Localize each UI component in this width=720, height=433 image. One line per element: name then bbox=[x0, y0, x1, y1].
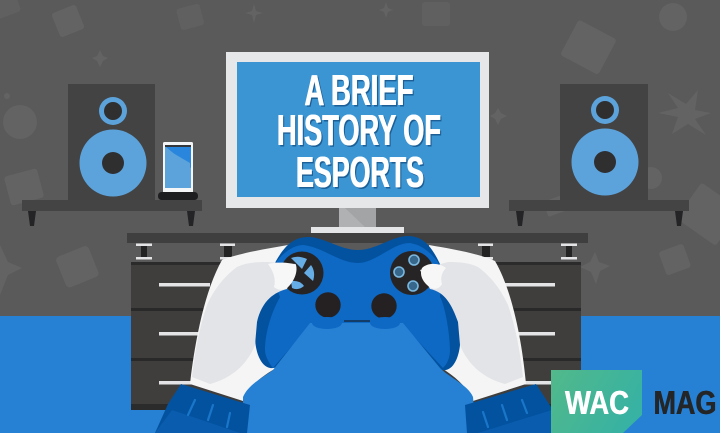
right speaker bbox=[560, 84, 648, 200]
desk bbox=[127, 233, 588, 410]
phone on dock bbox=[158, 142, 198, 200]
monitor bbox=[226, 52, 489, 208]
left thumbstick bbox=[315, 292, 341, 318]
title: HISTORY OF bbox=[278, 108, 442, 156]
left sleeve bbox=[155, 384, 250, 433]
monitor stand bbox=[311, 208, 404, 234]
title: ESPORTS bbox=[296, 148, 424, 197]
logo badge: WAC bbox=[565, 384, 629, 421]
left thumb bbox=[268, 263, 297, 290]
title: HISTORY OF bbox=[277, 106, 441, 155]
right sleeve bbox=[465, 384, 560, 433]
title bbox=[277, 66, 442, 198]
left d-pad bbox=[280, 252, 324, 294]
title: ESPORTS bbox=[296, 148, 424, 197]
left shelf bbox=[22, 200, 202, 226]
right shelf bbox=[509, 200, 689, 226]
right thumbstick bbox=[371, 293, 397, 319]
wall background bbox=[0, 0, 720, 316]
right buttons bbox=[390, 251, 434, 295]
controller lower bumps bbox=[310, 317, 404, 329]
left hand bbox=[190, 245, 290, 401]
game controller bbox=[255, 236, 460, 370]
left speaker bbox=[68, 84, 155, 200]
title: ESPORTS bbox=[298, 150, 426, 198]
title: A BRIEF bbox=[306, 68, 415, 116]
wall pattern bbox=[0, 0, 720, 295]
title: A BRIEF bbox=[305, 66, 414, 115]
title: A BRIEF bbox=[304, 66, 413, 115]
title: HISTORY OF bbox=[277, 106, 441, 155]
right palm bbox=[420, 262, 523, 384]
left palm bbox=[192, 262, 296, 384]
floor bbox=[0, 316, 720, 433]
right hand bbox=[428, 245, 526, 401]
logo badge bbox=[551, 370, 642, 433]
torso bbox=[243, 323, 476, 433]
right thumb bbox=[421, 264, 446, 289]
logo badge: WAC bbox=[565, 384, 629, 421]
